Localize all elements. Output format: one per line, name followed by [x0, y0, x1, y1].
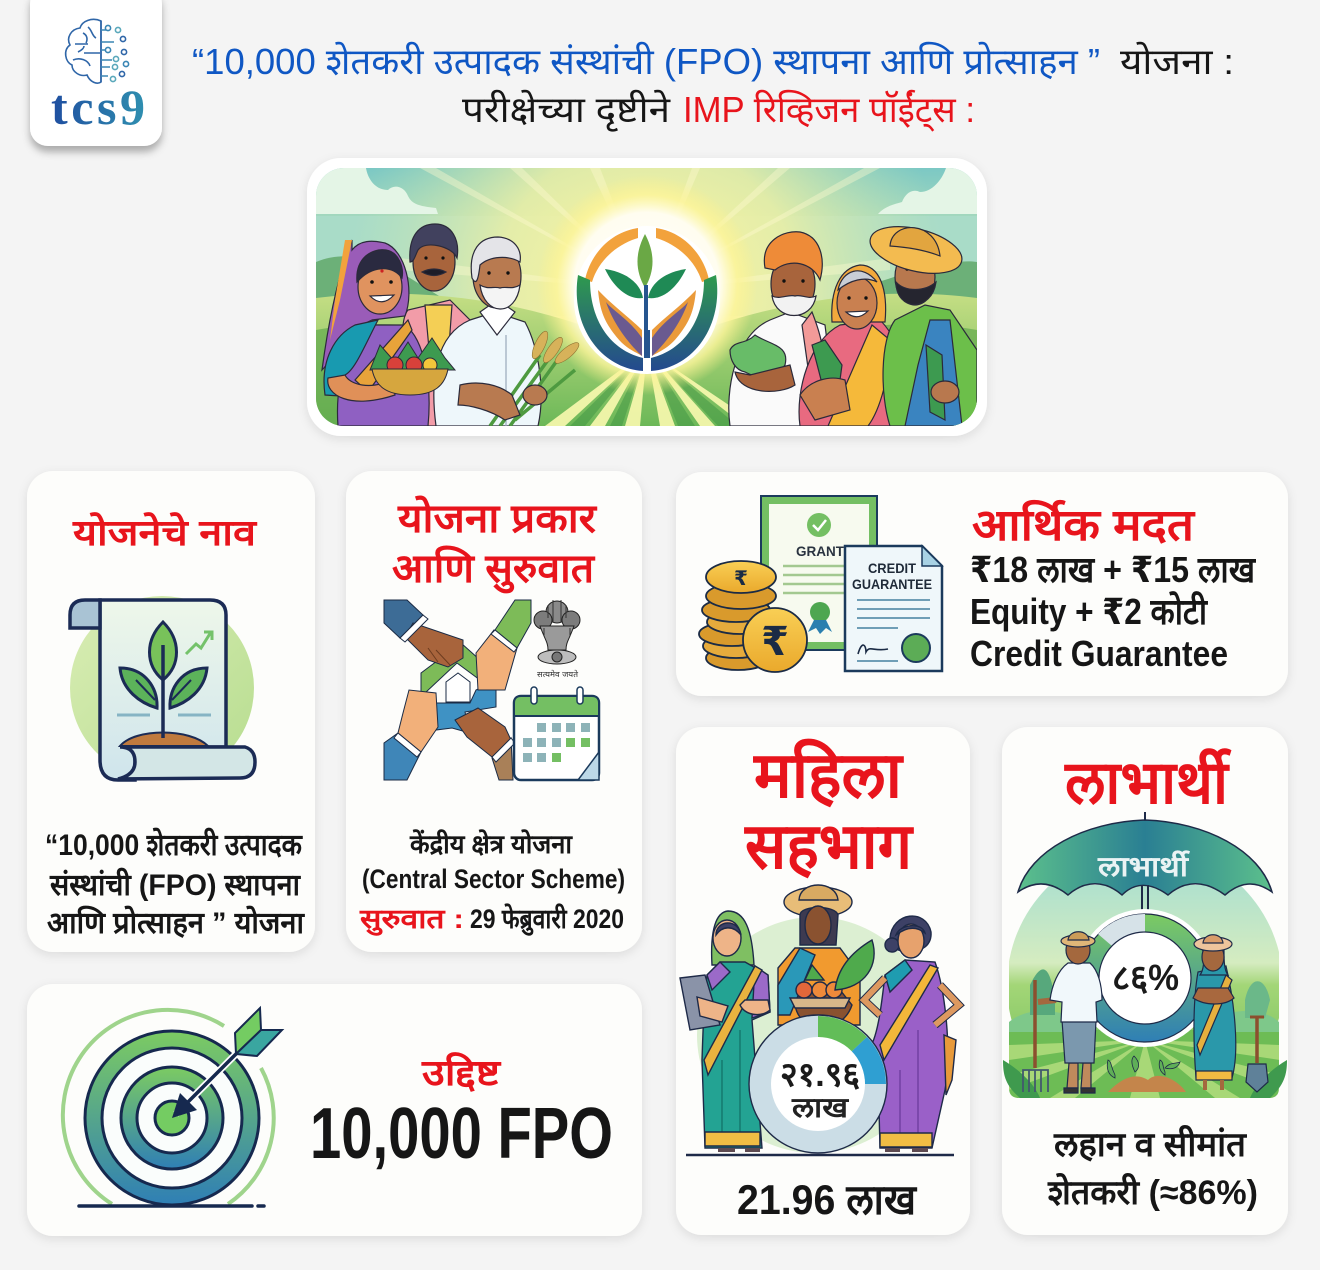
emblem: leaf and hands: [574, 226, 720, 374]
heading: women participation: महिला: [753, 738, 904, 811]
field rows: [1009, 1040, 1280, 1098]
heading: scheme type: योजना प्रकार: [397, 495, 598, 541]
bottom-left arm: [384, 733, 421, 780]
title: “10,000 शेतकरी उत्पादक संस्थांची (FPO) स्थापना आणि प्रोत्साहन ”: [192, 41, 1100, 82]
beneficiaries text: लहान व सीमांत: [1053, 1124, 1248, 1164]
illustration: umbrella and farmers: लाभार्थी: [1097, 850, 1190, 882]
top-left arm: [384, 600, 423, 638]
farmer woman with spade: [1193, 935, 1268, 1092]
icon: calendar: [514, 687, 599, 780]
heading: women participation: [744, 738, 914, 882]
heading: objective: उद्दिष्ट: [421, 1052, 502, 1093]
basket of vegetables: [370, 338, 455, 395]
farmer with fork: [1023, 932, 1102, 1093]
donut chart: 21.96 lakh: २१.९६: [780, 1056, 860, 1094]
scheme type text: 29 फेब्रुवारी 2020: [470, 903, 624, 936]
women count: 21.96 लाख: [737, 1176, 918, 1223]
illustration: three women with donut: [680, 885, 959, 1155]
financial support text: [970, 549, 1256, 674]
person: man with hat: [865, 218, 977, 426]
heading: scheme name: योजनेचे नाव: [72, 512, 258, 553]
panel: hero illustration: [307, 158, 987, 436]
scheme type text: केंद्रीय क्षेत्र योजना: [409, 829, 573, 859]
panel: objective: [27, 984, 642, 1236]
scheme name text: [45, 827, 305, 940]
title: IMP रिव्हिजन पॉईंट्स :: [683, 89, 975, 132]
icon: joined hands with house: [384, 600, 531, 780]
scheme type text: सुरुवात :: [359, 904, 464, 936]
title: परीक्षेच्या दृष्टीने: [462, 89, 671, 132]
donut chart: 21.96 lakh: [749, 1015, 887, 1153]
scheme name text: संस्थांची (FPO) स्थापना: [49, 867, 301, 902]
person: man behind: [402, 223, 470, 426]
panel: scheme type and start: [346, 471, 642, 952]
donut chart: 86 percent: [1076, 909, 1214, 1047]
person: woman with basket: [322, 240, 429, 426]
heading: scheme type: [392, 495, 598, 594]
illustration: umbrella and farmers: [1003, 812, 1287, 1123]
title: [192, 41, 1234, 132]
donut chart: 86 percent: ८६%: [1112, 957, 1179, 998]
heading: women participation: सहभाग: [744, 810, 914, 882]
woman in purple saree: [864, 916, 959, 1150]
hills: [316, 256, 439, 298]
logo wordmark: tcs9: [51, 79, 145, 135]
person: elder with wheat: [434, 237, 582, 426]
scheme name text: “10,000 शेतकरी उत्पादक: [45, 827, 303, 862]
panel: financial support: [676, 472, 1288, 696]
financial support text: Equity + ₹2 कोटी: [970, 591, 1208, 632]
scheme type text: (Central Sector Scheme): [362, 864, 625, 894]
woman with tablet: [680, 911, 770, 1150]
big number: 10,000 FPO: 10,000 FPO: [310, 1094, 613, 1174]
small soil mound with saplings: [1107, 1056, 1186, 1092]
clouds: [316, 168, 977, 214]
icon: rupee coin stack: ₹: [761, 620, 789, 664]
financial support text: Credit Guarantee: [970, 633, 1228, 674]
panel: women participation: [676, 727, 970, 1235]
person: woman in yellow saree: [798, 264, 890, 426]
heading: scheme type: आणि सुरुवात: [392, 545, 595, 594]
icon: target with arrow: [63, 1008, 282, 1206]
icon: credit guarantee document: CREDIT: [868, 560, 916, 576]
logo card: [30, 0, 162, 146]
icon: grant certificate: [761, 496, 877, 650]
icon: credit guarantee document: GUARANTEE: [852, 576, 932, 592]
sun rays: [400, 168, 890, 290]
financial support text: ₹18 लाख + ₹15 लाख: [970, 549, 1256, 590]
side plants: [1003, 1060, 1040, 1098]
donut chart: 21.96 lakh: लाख: [791, 1092, 849, 1123]
panel: scheme name: [27, 471, 315, 952]
icon: national emblem: [534, 600, 580, 679]
person: elder with turban: [729, 232, 829, 426]
top-right arm: [495, 600, 531, 648]
icon: rupee coin stack: [699, 561, 807, 672]
beneficiaries text: शेतकरी (≈86%): [1047, 1172, 1258, 1212]
beneficiaries text: [1047, 1124, 1258, 1212]
icon: grant certificate: GRANT: [796, 543, 844, 559]
scheme type text: [359, 829, 625, 936]
heading: beneficiaries: लाभार्थी: [1064, 748, 1232, 816]
icon: national emblem: सत्यमेव जयते: [537, 669, 578, 679]
title: योजना :: [1120, 41, 1234, 82]
heading: financial support: आर्थिक मदत: [972, 499, 1196, 550]
bottom-right arm: [492, 738, 513, 780]
icon: circuit brain: [66, 19, 129, 83]
icon: scroll with plant: [70, 596, 255, 780]
ground line: [686, 1154, 954, 1156]
panel: beneficiaries: [1002, 727, 1288, 1235]
icon: rupee coin stack: ₹: [734, 568, 748, 590]
woman with vegetables and hat: [778, 885, 874, 1028]
icon: credit guarantee document: [845, 546, 942, 671]
scheme name text: आणि प्रोत्साहन ” योजना: [47, 905, 305, 940]
